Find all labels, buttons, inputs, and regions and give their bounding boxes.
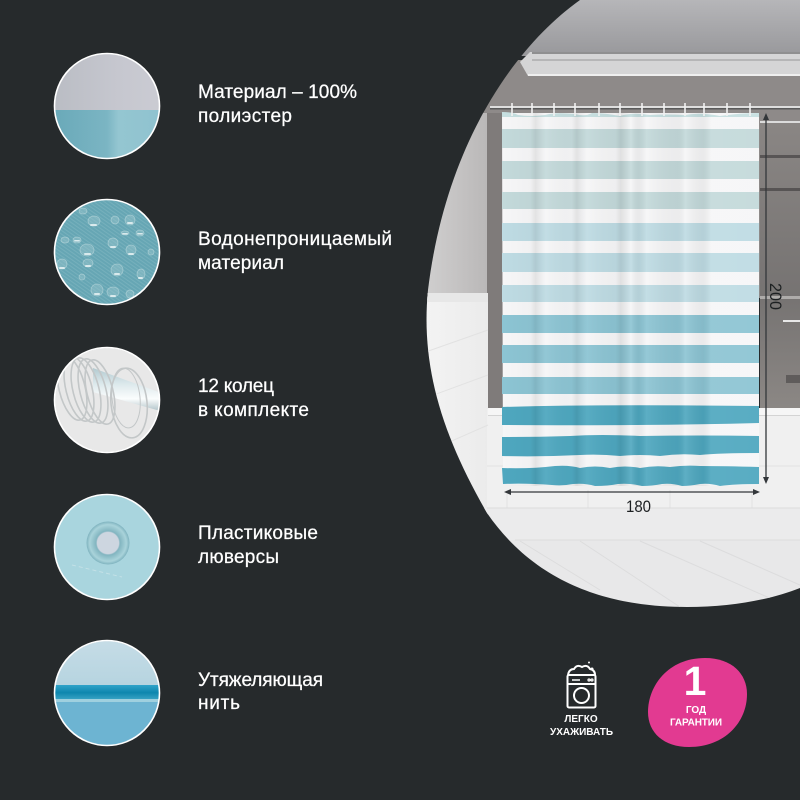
text: eyelets: Пластиковые (198, 523, 318, 544)
ceiling (522, 0, 800, 56)
tub tile lines (420, 330, 800, 508)
floor (508, 540, 800, 607)
text: rings: в комплекте (198, 400, 309, 421)
circle: weighted thread (54, 640, 160, 746)
icon: washing machine (568, 662, 596, 708)
curtain rod (490, 106, 800, 110)
text: material: Материал – 100% (198, 82, 357, 103)
circle: plastic eyelet (54, 494, 160, 600)
niche shade (487, 113, 503, 408)
tub rim (488, 408, 800, 416)
warranty text: ГОД (686, 705, 706, 716)
tiled left wall (426, 293, 488, 514)
dimension: width 180: 180 (626, 498, 651, 516)
pink blob (648, 658, 747, 747)
text: weighted thread: нить (198, 693, 240, 714)
crown moulding (520, 52, 800, 76)
dimension: height 200: 200 (766, 283, 784, 310)
circle: rings on rod (50, 345, 164, 455)
warranty badge (648, 658, 747, 747)
left wall (427, 113, 487, 300)
text: waterproof: Водонепроницаемый (198, 229, 392, 250)
top hem (502, 112, 759, 117)
tub base step (484, 508, 800, 540)
text: waterproof: материал (198, 253, 284, 274)
text: weighted thread (198, 670, 323, 714)
stripes pale grey-teal (502, 129, 759, 209)
curtain white base (502, 113, 759, 485)
hanging rings (512, 103, 750, 116)
text: rings (198, 376, 309, 421)
text: eyelets: люверсы (198, 547, 279, 568)
text: weighted thread: Утяжеляющая (198, 670, 323, 691)
text: easy care: ЛЕГКО (564, 714, 598, 725)
text: waterproof (198, 229, 392, 274)
wall shadow lines (760, 155, 800, 383)
text: material (198, 82, 357, 127)
text: easy care: УХАЖИВАТЬ (550, 727, 613, 738)
stripes mid blue (502, 315, 759, 394)
text: rings: 12 колец (198, 376, 274, 397)
number 1: 1 (684, 658, 706, 704)
faucet (783, 320, 800, 322)
circle: water drops (54, 198, 160, 306)
circle: material swatch (50, 50, 164, 160)
stripes pale blue (502, 223, 759, 302)
dimension: width 180 (504, 489, 760, 516)
text: eyelets (198, 523, 318, 568)
curtain (502, 103, 759, 486)
warranty badge: ГАРАНТИИ (670, 718, 722, 728)
bathtub front (487, 409, 800, 509)
back wall (480, 60, 800, 298)
right wall of niche (760, 151, 800, 408)
text: easy care (550, 714, 613, 738)
stripes deep teal (502, 405, 759, 486)
curtain fold shading (502, 113, 759, 486)
second rail (760, 121, 800, 123)
floor lines (487, 508, 800, 607)
photo: bathroom with shower curtain (420, 0, 800, 610)
dimension: height 200 (763, 113, 784, 484)
text: material: полиэстер (198, 106, 292, 127)
tile trim (427, 293, 457, 302)
